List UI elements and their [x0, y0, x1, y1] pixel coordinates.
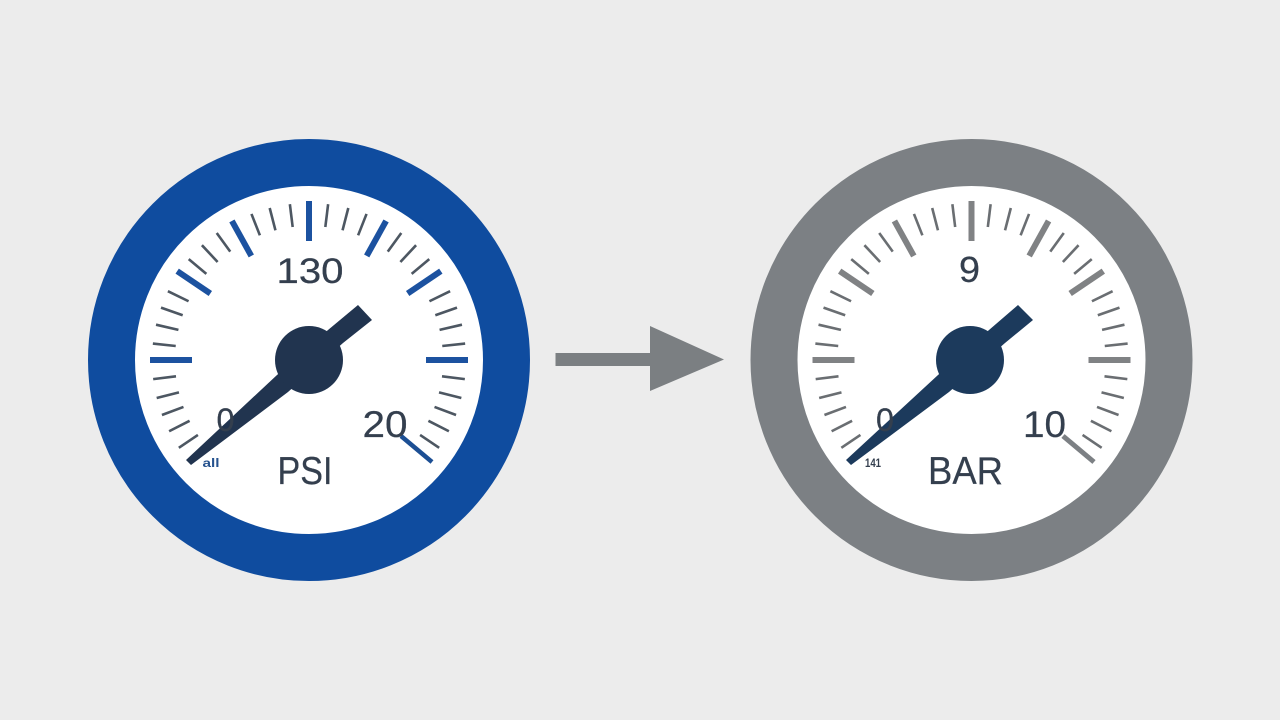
red-line tick: PSI	[401, 436, 432, 462]
scale value: 9: 9	[959, 249, 980, 290]
scale value: 0: 0	[876, 402, 894, 438]
scale value: 20: 20	[362, 404, 408, 445]
scale value: 0: 0	[216, 402, 234, 438]
needle: BAR	[846, 305, 1033, 465]
small mark: BAR: 141	[865, 456, 881, 470]
arrow: PSI to BAR	[556, 326, 724, 391]
unit label: PSI: PSI	[278, 450, 332, 493]
red-line tick: BAR	[1063, 436, 1094, 462]
unit label: BAR: BAR	[928, 450, 1003, 493]
major ticks: PSI	[150, 201, 468, 360]
scale value: 10: 10	[1023, 404, 1066, 445]
scale value: 130: 130	[276, 252, 344, 291]
gauge ring: grey	[774, 162, 1169, 558]
needle: PSI	[186, 305, 372, 465]
major ticks: BAR	[812, 201, 1130, 360]
small mark: PSI: all	[202, 456, 220, 470]
minor ticks: BAR	[815, 204, 1128, 448]
gauge: BAR	[774, 162, 1169, 558]
gauge: PSI	[112, 162, 506, 558]
needle hub: BAR	[936, 326, 1004, 394]
needle hub: PSI	[275, 326, 343, 394]
minor ticks: PSI	[153, 204, 465, 448]
gauge ring: blue	[112, 162, 506, 558]
